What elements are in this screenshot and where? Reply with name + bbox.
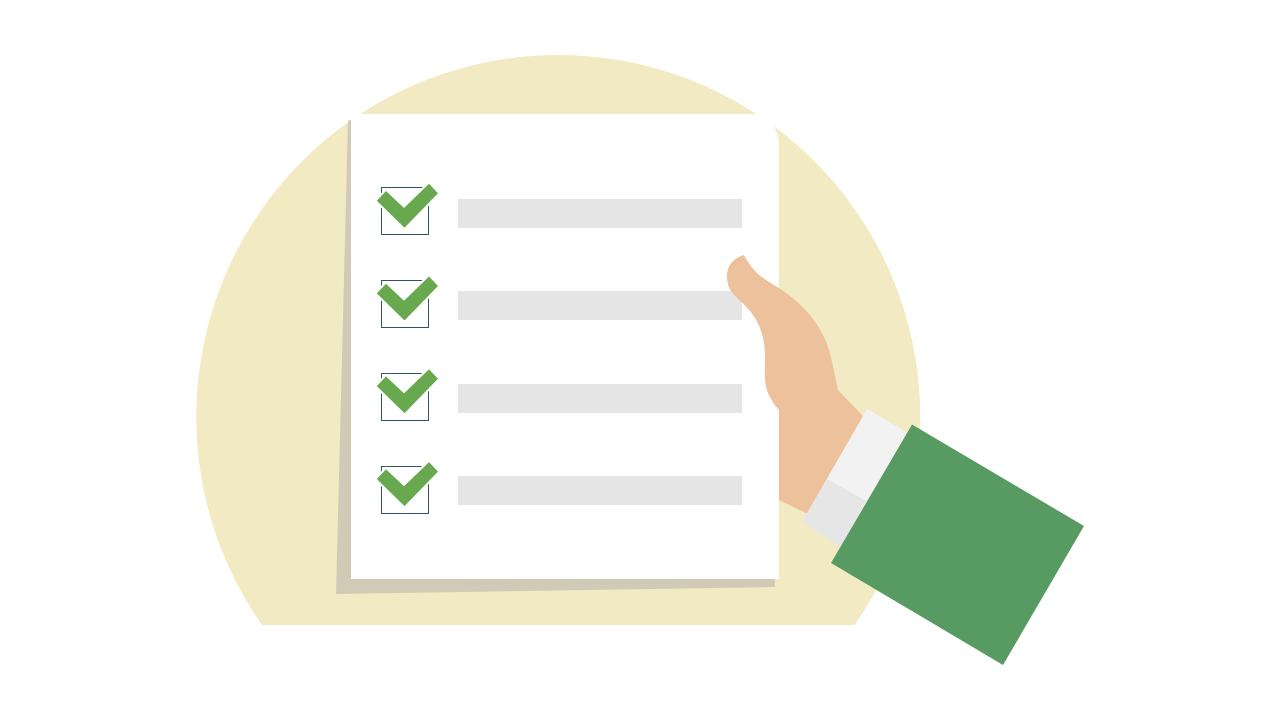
hand xyxy=(727,255,870,515)
checkbox 1 xyxy=(377,184,438,234)
text line 3 xyxy=(458,384,742,413)
text line 4 xyxy=(458,476,742,505)
text line 1 xyxy=(458,199,742,228)
jacket sleeve xyxy=(831,424,1084,665)
checkbox 3 xyxy=(377,369,438,420)
paper sheet xyxy=(351,114,779,579)
checkbox 2 xyxy=(377,276,438,328)
checkbox 4 xyxy=(377,462,438,514)
shirt cuff xyxy=(802,409,912,547)
text line 2 xyxy=(458,291,742,320)
paper shadow xyxy=(336,119,775,594)
background circle xyxy=(196,55,920,625)
